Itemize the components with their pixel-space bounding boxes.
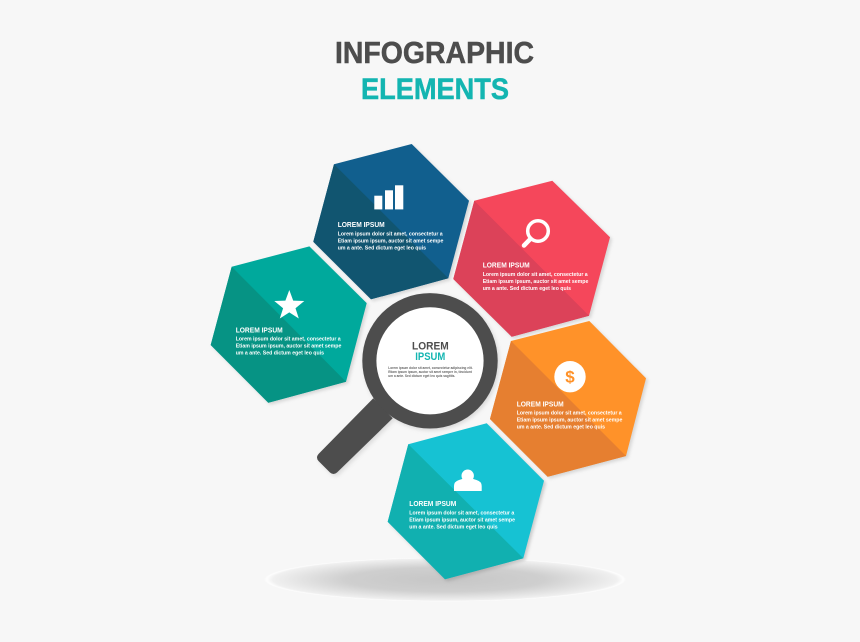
teal panel text: LOREM IPSUM	[236, 325, 283, 334]
panel: cyan hexagon	[388, 423, 546, 581]
icon: person	[454, 470, 482, 491]
orange panel text	[517, 399, 623, 431]
blue panel text	[338, 220, 444, 252]
title: ELEMENTS	[361, 73, 509, 106]
ground shadow	[264, 558, 626, 602]
blue panel text: Etiam ipsum ipsum, auctor sit amet sempe	[338, 238, 443, 244]
icon: dollar coin: $	[565, 368, 575, 387]
icon: star	[274, 290, 304, 318]
blue panel text: um a ante. Sed dictum eget leo quis	[338, 246, 426, 252]
red panel text	[483, 261, 589, 292]
title	[335, 35, 534, 106]
panel: teal hexagon	[211, 246, 369, 405]
teal panel text	[236, 325, 342, 357]
icon: dollar coin	[554, 361, 586, 392]
cyan panel text: Etiam ipsum ipsum, auctor sit amet sempe	[409, 517, 515, 523]
panel: red hexagon	[453, 181, 612, 339]
icon: magnifier	[524, 221, 548, 246]
red panel text: Lorem ipsum dolor sit amet, consectetur a	[483, 272, 589, 278]
center text: LOREM	[412, 340, 449, 352]
cyan panel text: Lorem ipsum dolor sit amet, consectetur a	[409, 510, 515, 516]
title: INFOGRAPHIC	[335, 35, 534, 70]
teal panel text: um a ante. Sed dictum eget leo quis	[236, 351, 324, 357]
center text	[388, 340, 473, 378]
orange panel text: Etiam ipsum ipsum, auctor sit amet sempe	[517, 418, 622, 424]
blue panel text: LOREM IPSUM	[338, 220, 385, 229]
orange panel text: LOREM IPSUM	[517, 399, 564, 408]
red panel text: um a ante. Sed dictum eget leo quis	[483, 286, 571, 292]
cyan panel text: LOREM IPSUM	[409, 499, 456, 508]
icon: bar chart	[374, 185, 403, 209]
orange panel text: Lorem ipsum dolor sit amet, consectetur a	[517, 411, 623, 417]
teal panel text: Etiam ipsum ipsum, auctor sit amet sempe	[236, 344, 341, 350]
blue panel text: Lorem ipsum dolor sit amet, consectetur a	[338, 232, 444, 238]
orange panel text: um a ante. Sed dictum eget leo quis	[517, 425, 605, 431]
center text: Etiam ipsum ipsum, auctor sit amet semper in, tincidunt	[388, 370, 473, 374]
panel: orange hexagon	[490, 321, 648, 479]
red panel text: Etiam ipsum ipsum, auctor sit amet sempe	[483, 279, 588, 285]
cyan panel text: um a ante. Sed dictum eget leo quis	[409, 524, 498, 530]
magnifying glass	[317, 293, 499, 476]
center text: um a ante. Sed dictum eget leo quis sagittis.	[388, 374, 455, 378]
panel: blue hexagon	[313, 144, 471, 301]
red panel text: LOREM IPSUM	[483, 261, 530, 270]
center text: IPSUM	[415, 351, 445, 363]
center text: Lorem ipsum dolor sit amet, consectetur adipiscing elit.	[388, 366, 473, 370]
cyan panel text	[409, 499, 515, 530]
teal panel text: Lorem ipsum dolor sit amet, consectetur a	[236, 337, 342, 343]
